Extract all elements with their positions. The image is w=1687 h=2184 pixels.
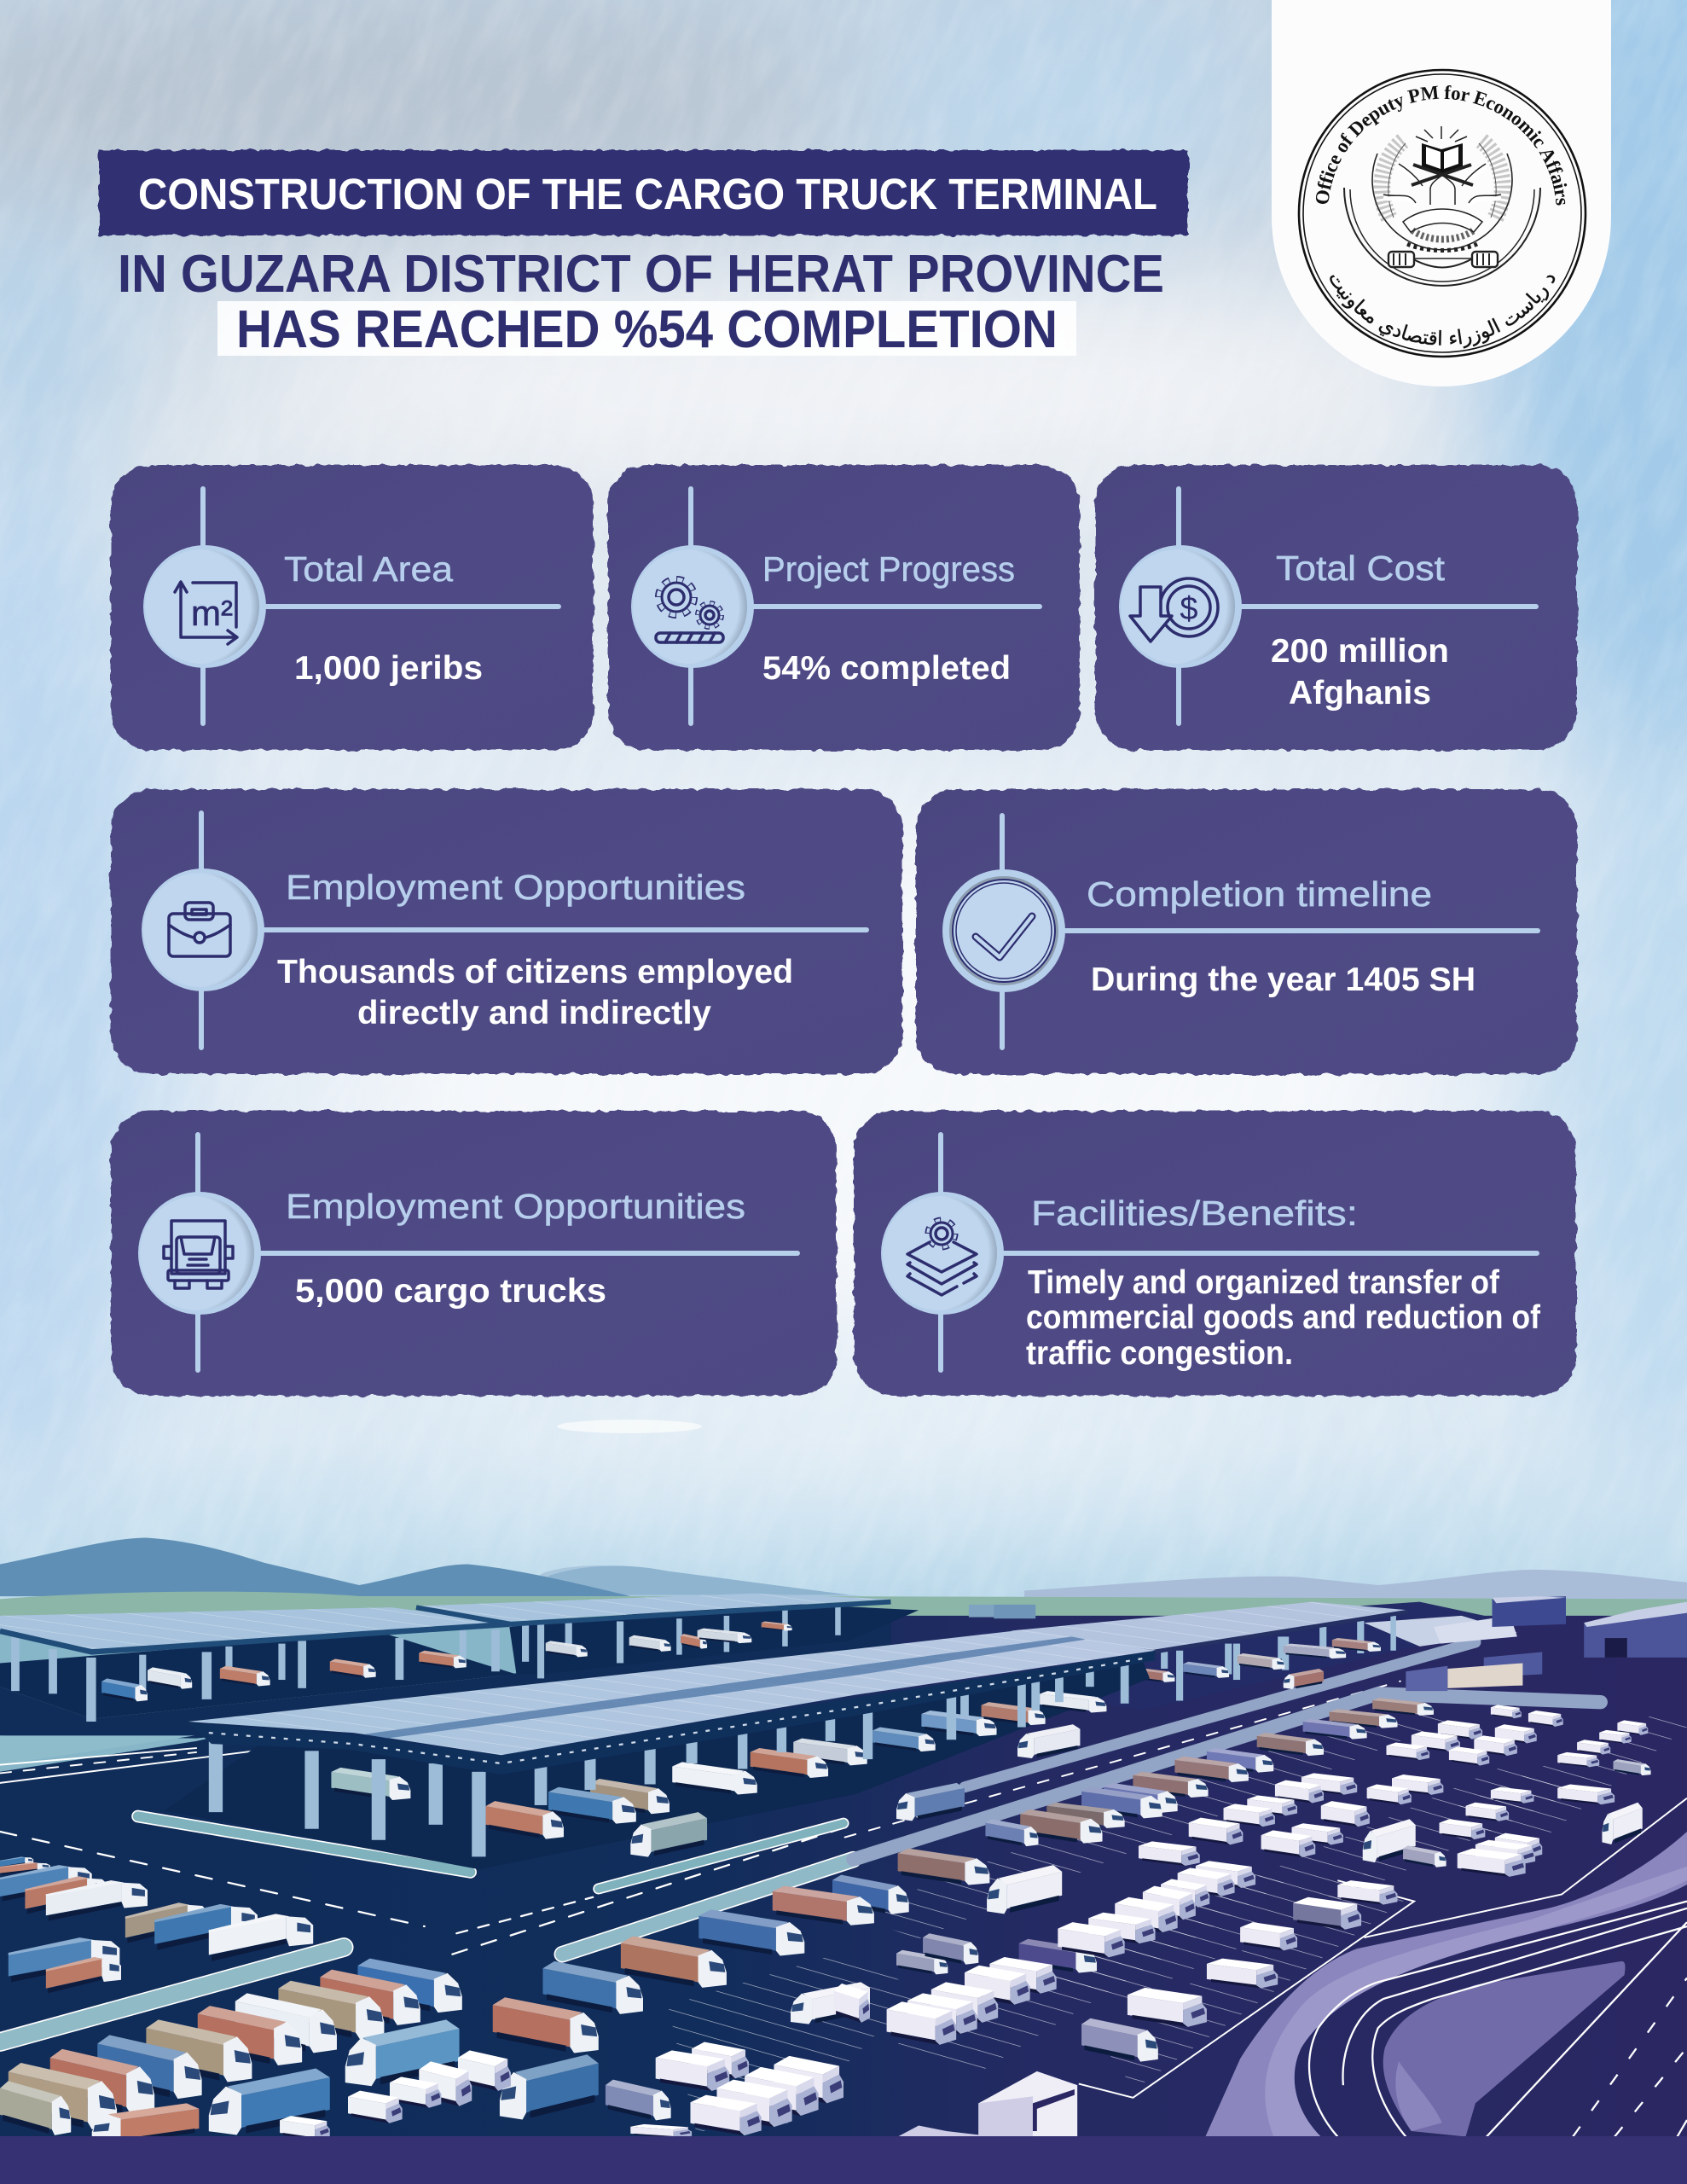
- wheat wreath: [1382, 141, 1503, 220]
- icon: check mark: [953, 880, 1055, 982]
- main canopy plate and trucks: [165, 1658, 1324, 1869]
- icon: coin and arrow: $: [1180, 591, 1198, 627]
- value: Timely and organized transfer of: [1028, 1264, 1500, 1301]
- value: 1,000 jeribs: [294, 650, 483, 687]
- trucks: centre lot: [542, 1698, 1651, 2120]
- value: During the year 1405 SH: [1091, 961, 1475, 998]
- heading: Total Cost: [1276, 549, 1446, 588]
- back canopies: [0, 1594, 1409, 1722]
- interchange: [1205, 1832, 1687, 2137]
- value: [1026, 1264, 1541, 1372]
- terminal illustration: [0, 1538, 1687, 2145]
- seal English text: Office of Deputy PM for Economic Affairs: [1315, 85, 1568, 205]
- heading: Facilities/Benefits:: [1031, 1194, 1358, 1233]
- icon: coin and arrow: [1130, 578, 1218, 642]
- main canopy roof: [188, 1629, 1156, 1774]
- value: 54% completed: [762, 650, 1011, 687]
- title line 2: IN GUZARA DISTRICT OF HERAT PROVINCE: [118, 245, 1164, 304]
- teal ground: [0, 1618, 890, 1772]
- value: commercial goods and reduction of: [1026, 1299, 1541, 1336]
- title line 1: CONSTRUCTION OF THE CARGO TRUCK TERMINAL: [138, 170, 1157, 218]
- seal rings: [1299, 70, 1586, 357]
- value: Afghanis: [1289, 675, 1431, 712]
- heading: Employment Opportunities: [286, 1187, 745, 1226]
- parking bays: [668, 1702, 1687, 2131]
- icon: gear and layers: [907, 1221, 977, 1295]
- icon: gears and progress: [656, 580, 723, 642]
- value: [1271, 633, 1449, 712]
- trucks: lower left lot: [0, 1959, 599, 2144]
- ground: [0, 1616, 1687, 2145]
- heading: Total Area: [284, 549, 453, 589]
- icon: truck: [164, 1221, 233, 1288]
- national emblem: [1344, 126, 1540, 286]
- title banner: [99, 150, 1188, 235]
- trucks: box truck rows: [630, 1705, 1648, 2138]
- back lots: [0, 1602, 1517, 1765]
- road markings: [0, 1682, 1400, 1955]
- back buildings: [969, 1596, 1687, 1691]
- value: 5,000 cargo trucks: [295, 1273, 606, 1310]
- main canopy columns: [209, 1662, 1129, 1856]
- value: Thousands of citizens employed: [277, 954, 793, 990]
- icon: briefcase: [169, 903, 230, 956]
- title line 3: HAS REACHED %54 COMPLETION: [236, 300, 1058, 359]
- panel: facilities and benefits: [854, 1111, 1576, 1396]
- curbs: [0, 1642, 1601, 2042]
- seal Dari text: د ریاست الوزراء اقتصادي معاونیت: [1330, 275, 1556, 348]
- lot boundary lines: [1079, 1798, 1687, 2098]
- value: traffic congestion.: [1026, 1335, 1293, 1372]
- panel: completion timeline: [916, 789, 1577, 1074]
- heading: Employment Opportunities: [286, 868, 745, 907]
- mountains: [0, 1538, 1687, 1616]
- logo panel: [1272, 0, 1611, 386]
- icon: area: m²: [191, 593, 233, 633]
- value: directly and indirectly: [357, 995, 711, 1031]
- panel: cargo trucks: [111, 1111, 837, 1396]
- panel: employment opportunities: [111, 789, 902, 1074]
- bottom bar: [0, 2136, 1687, 2184]
- panel: total area: [111, 465, 594, 750]
- panel: total cost: [1095, 465, 1577, 750]
- heading: Completion timeline: [1087, 874, 1432, 914]
- icon: area: [175, 582, 237, 644]
- front building: [898, 2071, 1077, 2137]
- heading: Project Progress: [762, 549, 1015, 589]
- panel: project progress: [608, 465, 1080, 750]
- green plain: [0, 1592, 1687, 1623]
- value: [277, 954, 793, 1031]
- value: 200 million: [1271, 633, 1449, 670]
- trucks: upper left lot: [0, 1856, 313, 1993]
